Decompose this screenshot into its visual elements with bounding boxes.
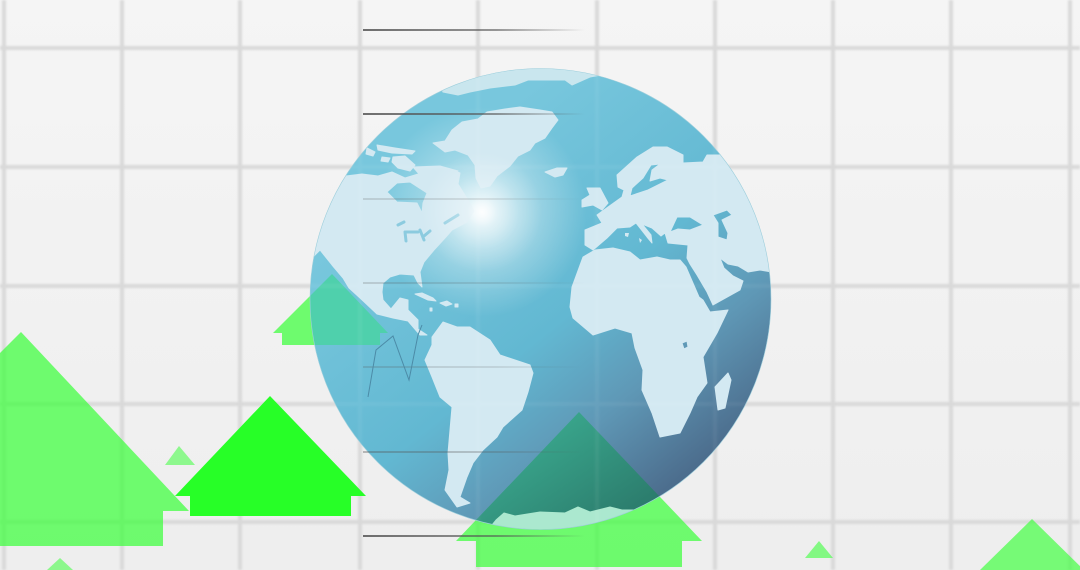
specular highlight — [442, 164, 532, 262]
small arrow, bottom centre right — [805, 541, 833, 558]
small arrow, left — [165, 446, 195, 465]
large translucent arrow, left — [0, 332, 189, 546]
Caribbean islands — [415, 293, 458, 311]
globe outline — [310, 68, 771, 530]
globe — [310, 68, 771, 530]
arctic cap — [442, 68, 598, 96]
North America — [314, 172, 466, 336]
Mediterranean islands — [625, 233, 642, 243]
Iceland — [545, 168, 567, 177]
arrow, bottom right corner — [980, 519, 1080, 570]
sparkline — [368, 325, 422, 397]
ocean — [310, 68, 772, 530]
ocean highlight — [389, 118, 578, 308]
faint grid through globe — [477, 402, 716, 520]
chart gridlines — [363, 30, 585, 536]
Arctic islands — [366, 145, 458, 176]
arrow seen through the globe, upper left — [310, 274, 388, 345]
Great Lakes — [398, 215, 458, 241]
Madagascar — [715, 373, 731, 410]
small arrow, bottom left — [47, 558, 73, 570]
bright green arrow — [175, 396, 366, 516]
Antarctica — [492, 506, 634, 530]
Eurasia — [585, 147, 800, 305]
Greenland — [433, 107, 558, 188]
land masses — [314, 68, 769, 530]
arrow behind globe, bottom centre — [456, 412, 702, 567]
arrow behind globe, upper left — [273, 274, 388, 345]
Central America tip and South America — [425, 322, 533, 507]
Africa — [570, 248, 728, 437]
United Kingdom and Ireland — [582, 188, 608, 210]
arrow seen through the globe, bottom centre — [476, 412, 659, 524]
